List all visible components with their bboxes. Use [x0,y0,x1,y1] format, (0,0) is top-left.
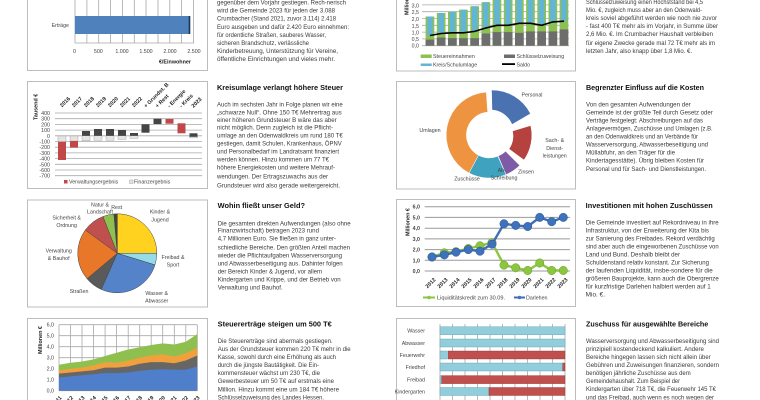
text block: key allocation peak: 2,6 Mio. €. Im Crumbacher Haushalt verbleiben [586,31,714,38]
panel: waterfall chart of results: 2018 [83,96,96,109]
heading and text: tax revenue up: durch die jüngste Bautätigkeit. Die Ein- [218,362,319,369]
heading and text: subsidies for selected areas: Gebühren und Zuweisungen finanzieren, sondern [586,362,720,369]
text block: expenses and income per inhabitant: für ordentliche Straßen, sauberes Wasser, [217,32,326,39]
panel: waterfall chart of results [28,82,208,188]
panel: waterfall chart of results: 200 [41,122,50,128]
panel: waterfall chart of results: + Rest [155,93,171,109]
heading and text: district levy: umlage an den Odenwaldkreis um rund 180 T€ [217,133,343,140]
text block: key allocation peak: kreis soviel abgeführt werden wie noch nie zuvor [586,15,717,22]
panel: spending pie chart: Freibad & [162,255,185,261]
panel: spending pie chart: Verwaltung [46,249,72,255]
heading and text: subsidies for selected areas: Gemeindehaushalt. Zum Beispiel der [586,378,680,385]
panel: spending pie chart: Kinder & [150,210,171,216]
heading and text: tax revenue up [218,320,351,400]
panel: waterfall chart of results: 2022 [131,96,144,109]
heading and text: where the money goes: Finanzwirtschaft) betragen 2023 rund [218,228,320,235]
heading and text: where the money goes: der Bereich Kinder & Jugend, vor allem [218,268,322,275]
panel: tax revenue stacked area chart: 6,0 [47,323,54,329]
panel: waterfall chart of results: - Kreis [179,93,195,109]
heading and text: where the money goes: wieder die Pflichtaufgaben Wasserversorgung [217,252,343,259]
panel: waterfall chart of results: 400 [41,111,50,117]
heading and text: district levy: werden können. Hinzu kommen um 77 T€ [216,157,330,164]
panel: subsidy share stacked bars: Abwasser [402,341,425,347]
heading and text: where the money goes: schiedliche Bereiche. Den größten Anteil machen [218,244,351,251]
heading and text: tax revenue up: Million. Hinzu kommt eine um 184 T€ höhere [218,386,340,393]
panel: loans and liquidity credit line chart: Liquiditätskredit zum 30.09. [437,296,505,302]
panel: tax revenue, key allocation and levy stacked bars: 0,0 [412,44,419,50]
panel: tax revenue, key allocation and levy stacked bars: Schlüsselzuweisung [516,54,564,60]
panel: waterfall chart of results: + Grundst. B [143,82,170,109]
panel: tax revenue, key allocation and levy stacked bars: 3,0 [412,3,419,9]
text block: key allocation peak: letzten Jahr, also knapp über 1,8 Mio. €. [586,48,692,55]
heading and text: district levy: Grundsteuer wird also gerade weitergereicht. [217,182,340,189]
panel: income per inhabitant bar chart: 1.500 [139,49,153,55]
text block: expenses and income per inhabitant [216,0,349,63]
heading and text: investments with grants: für kurzfristige Darlehen halbiert werden auf 1 [586,284,711,291]
text block: expenses and income per inhabitant: wird die Gemeinde 2023 für jeden der 3.088 [216,8,336,15]
panel: spending pie chart: Landschaft [87,210,113,216]
heading and text: district levy: wendungen. Der Ertragszuwachs aus der [216,173,328,180]
panel: expense donut chart: Umlagen [419,128,441,134]
heading and text: district levy: „schwarze Null“. Ohne 150 T€ Mehrertrag aus [217,110,342,117]
panel: loans and liquidity credit line chart: 2012 [425,277,437,290]
panel: tax revenue stacked area chart: 2,0 [47,367,54,373]
panel: subsidy share stacked bars [395,318,576,400]
panel: waterfall chart of results: 100 [41,128,50,134]
panel: tax revenue, key allocation and levy stacked bars: 1,5 [412,24,419,30]
panel: tax revenue, key allocation and levy stacked bars [396,0,576,71]
heading and text: limited influence on costs: Begrenzter Einfluss auf die Kosten [586,83,704,92]
panel: spending pie chart: Rest [111,205,123,211]
heading and text: investments with grants: der laufenden Liquidität, insbe-sondere für die [586,268,713,275]
panel: spending pie chart: Jugend [151,217,169,223]
panel: waterfall chart of results: 2021 [119,96,132,109]
heading and text: tax revenue up: Kasse, sowohl durch eine Erhöhung als auch [218,354,337,361]
panel: loans and liquidity credit line chart: 2020 [521,277,533,290]
panel: expense donut chart: Zinsen [518,170,534,176]
heading and text: investments with grants: Land und Bund. Deshalb bleibt der [586,252,680,259]
panel: tax revenue stacked area chart: 0,0 [47,389,54,395]
heading and text: investments with grants: Mio. €. [586,292,605,299]
text block: expenses and income per inhabitant: sicheren Brandschutz, verlässliche [217,40,310,47]
panel: tax revenue stacked area chart [28,318,208,400]
panel: waterfall chart of results: -700 [39,174,50,180]
heading and text: tax revenue up: Aus der Grundsteuer kommen 220 T€ mehr in die [218,346,351,353]
heading and text: investments with grants [586,201,719,299]
panel: spending pie chart: Sport [167,263,180,269]
panel: subsidy share stacked bars: Wasser [407,329,425,335]
panel: income per inhabitant bar chart: 1.000 [115,49,129,55]
panel: loans and liquidity credit line chart: 2014 [449,277,461,290]
heading and text: where the money goes: Die gesamten direkten Aufwendungen (also ohne [218,220,351,227]
panel: tax revenue, key allocation and levy stacked bars: Kreis/Schulumlage [433,62,477,68]
donut slices [446,90,532,178]
heading and text: tax revenue up: Die Steuererträge sind abermals gestiegen. [218,338,333,345]
heading and text: district levy: Auch im sechsten Jahr in Folge planen wir eine [217,101,343,108]
heading and text: district levy: höhere Energiekosten und weitere Mehrauf- [217,165,335,172]
panel: waterfall chart of results: -300 [39,151,50,157]
heading and text: district levy: Kreisumlage verlangt höhere Steuer [217,83,343,92]
panel: waterfall chart of results: 0 [47,134,50,140]
heading and text: tax revenue up: Gewerbesteuer um 50 T€ auf erstmals eine [218,378,335,385]
panel: loans and liquidity credit line chart: 6,0 [413,205,420,211]
panel: tax revenue stacked area chart: 4,0 [47,345,54,351]
panel: loans and liquidity credit line chart: 2015 [461,277,473,290]
heading and text: subsidies for selected areas: Wasserversorgung und Abwasserbeseitigung sind [586,338,720,345]
heading and text: subsidies for selected areas [586,320,720,400]
panel: expense donut chart: leistungen [543,154,567,160]
panel: tax revenue stacked area chart: 1,0 [47,378,54,384]
panel: waterfall chart of results: 2020 [107,96,120,109]
panel: loans and liquidity credit line chart: 0,0 [413,269,420,275]
panel: waterfall chart of results: 300 [41,117,50,123]
panel: income per inhabitant bar chart: Erträge [52,23,69,29]
panel: expense donut chart: Zuschüsse [454,176,480,182]
panel: expense donut chart: Personal [522,92,542,98]
panel: loans and liquidity credit line chart: 2016 [473,277,485,290]
heading and text: tax revenue up: kommensteuer wächst um 230 T€, die [218,370,321,377]
panel: loans and liquidity credit line chart: 2018 [497,277,509,290]
panel: waterfall chart of results: 2019 [95,96,108,109]
panel: spending pie chart: Natur & [91,203,109,209]
pie slices [78,214,157,293]
panel: loans and liquidity credit line chart: 2023 [557,277,569,290]
panel: loans and liquidity credit line chart: Darlehen [526,296,548,302]
panel: loans and liquidity credit line chart: 2021 [533,277,545,290]
heading and text: district levy: gestiegen, damit Schulen, Krankenhaus, ÖPNV [217,141,343,148]
panel: loans and liquidity credit line chart: 2,0 [413,248,420,254]
heading and text: limited influence on costs: Personal und für Sach- und Dienstleistungen. [586,166,706,173]
heading and text: subsidies for selected areas: Kindergarten über 718 T€, die Feuerwehr 145 T€ [586,386,717,393]
text block: key allocation peak: - fast 400 T€ mehr als im Vorjahr, in Summe über [586,23,718,30]
heading and text: where the money goes: Kindergarten und Krippe, und der Betrieb von [218,276,341,283]
heading and text: investments with grants: Investitionen mit hohen Zuschüssen [586,201,713,210]
panel: waterfall chart of results: Finanzergebnis [134,180,171,186]
heading and text: limited influence on costs: Gemeinde ist der größte Teil durch Gesetz oder [586,110,713,117]
panel: waterfall chart of results: - Energie [167,89,187,109]
panel: waterfall chart of results: 2016 [59,96,72,109]
text block: expenses and income per inhabitant: Kinderbetreuung, Unterstützung für Vereine, [217,48,338,55]
panel: subsidy share stacked bars: Freibad [407,378,425,384]
panel: expense donut chart: Schreibung [491,176,517,182]
heading and text: subsidies for selected areas: Zuschuss für ausgewählte Bereiche [586,320,708,328]
panel: loans and liquidity credit line chart: 2019 [509,277,521,290]
panel: tax revenue stacked area chart: 3,0 [47,356,54,362]
panel: loans and liquidity credit line chart: 2013 [437,277,449,290]
heading and text: investments with grants: größeren Bauprojekte, kann auch die Obergrenze [586,276,719,283]
heading and text: limited influence on costs: Wasserversorgung, Abwasserbeseitigung und [586,141,709,148]
panel: expense donut chart: Sach- & [545,138,565,144]
heading and text: district levy: und Personalbedarf im Landratsamt finanziert [217,149,339,156]
heading and text: limited influence on costs: Anlagevermögen, Zuschüsse und Umlagen (z.B. [586,125,713,132]
panel: tax revenue, key allocation and levy stacked bars: 2,0 [412,17,419,23]
heading and text: where the money goes: Wohin fließt unser Geld? [218,201,306,210]
heading and text: investments with grants: Die Gemeinde investiert auf Rekordniveau in ihre [586,220,719,227]
panel: loans and liquidity credit line chart [396,200,576,306]
panel: tax revenue stacked area chart: 5,0 [47,334,54,340]
panel: expense donut chart: Ab- [498,168,506,174]
panel: loans and liquidity credit line chart: 5,0 [413,215,420,221]
heading and text: limited influence on costs: Von den gesamten Aufwendungen der [586,101,691,108]
heading and text: investments with grants: zur Sanierung des Freibades. Rekord verdächtig [586,236,715,243]
panel: waterfall chart of results: -200 [39,145,50,151]
heading and text: where the money goes [217,201,351,291]
panel: tax revenue, key allocation and levy stacked bars: 1,0 [412,31,419,37]
panel: income per inhabitant bar chart [28,0,208,70]
panel: income per inhabitant bar chart: 2.500 [187,49,201,55]
panel: expense donut chart: Dienst- [546,146,563,152]
heading and text: subsidies for selected areas: Bereiche hingegen lassen sich nicht allein über [586,354,711,361]
heading and text: district levy [216,83,343,189]
heading and text: where the money goes: und Abwasserbeseitigung aus. Dahinter folgen [218,260,343,267]
panel: tax revenue, key allocation and levy stacked bars: Steuereinnahmen [433,54,475,60]
panel: income per inhabitant bar chart: 500 [94,49,103,55]
text block: key allocation peak: für eigene Zwecke gerade mal 72 T€ mehr als im [586,40,715,47]
heading and text: where the money goes: Verwaltung und Bauhof. [218,284,283,291]
heading and text: limited influence on costs: Verträge festgelegt: Abschreibungen auf das [586,117,703,124]
text block: expenses and income per inhabitant: Crumbacher (Stand 2021, zuvor 3.114) 2.418 [217,15,337,22]
panel: spending pie chart: Ordnung [56,223,77,229]
panel: waterfall chart of results: -600 [39,168,50,174]
heading and text: subsidies for selected areas: prinzipiell kostendeckend kalkuliert. Andere [586,346,705,353]
panel: spending pie chart [28,200,208,307]
panel: loans and liquidity credit line chart: 3,0 [413,237,420,243]
heading and text: investments with grants: Schuldenstand relativ konstant. Zur Sicherung [586,260,710,267]
text block: expenses and income per inhabitant: öffentliche Einrichtungen und vieles mehr. [217,56,335,63]
panel: waterfall chart of results: Tausend € [34,94,40,120]
panel: tax revenue, key allocation and levy stacked bars: 2,5 [412,10,419,16]
panel: loans and liquidity credit line chart: Millionen € [406,208,412,236]
panel: expense donut chart [396,82,576,189]
heading and text: subsidies for selected areas: benötigen jährliche Zuschüsse aus dem [586,370,691,377]
panel: income per inhabitant bar chart: 0 [73,49,76,55]
heading and text: tax revenue up: Steuererträge steigen um 500 T€ [218,320,332,328]
panel: waterfall chart of results: -500 [39,162,50,168]
panel: spending pie chart: & Bauhof [48,256,70,262]
panel: spending pie chart: Wasser & [145,291,169,297]
text block: key allocation peak: Mio. €, zugleich muss aber an den Odenwald- [586,7,702,14]
heading and text: limited influence on costs [586,83,713,173]
panel: income per inhabitant bar chart: 2.000 [163,49,177,55]
panel: loans and liquidity credit line chart: 2017 [485,277,497,290]
heading and text: limited influence on costs: an den Odenwaldkreis und an Verbände für [586,133,698,140]
panel: tax revenue stacked area chart: Millionen € [38,326,44,354]
panel: waterfall chart of results: 2023 [191,97,203,109]
panel: subsidy share stacked bars: Feuerwehr [400,353,425,359]
panel: loans and liquidity credit line chart: 2022 [545,277,557,290]
panel: spending pie chart: Straßen [70,289,88,295]
panel: spending pie chart: Sicherheit & [52,216,81,222]
panel: waterfall chart of results: -100 [39,140,50,146]
heading and text: where the money goes: 4,7 Millionen Euro. Sie fließen in ganz unter- [218,236,336,243]
panel: loans and liquidity credit line chart: 4,0 [413,226,420,232]
panel: tax revenue, key allocation and levy stacked bars: Saldo [516,62,530,68]
panel: subsidy share stacked bars: Friedhof [406,365,426,371]
heading and text: investments with grants: Infrastruktur, von der Erweiterung der Kita bis [586,228,709,235]
text block: key allocation peak [586,0,718,55]
panel: tax revenue, key allocation and levy stacked bars: 0,5 [412,37,419,43]
heading and text: district levy: einer höheren Grundsteuer B wäre das aber [217,117,337,124]
panel: waterfall chart of results: -400 [39,157,50,163]
panel: spending pie chart: Abwasser [145,298,169,304]
panel: waterfall chart of results: 2017 [71,96,84,109]
text block: expenses and income per inhabitant: Euro ausgeben und dafür 2.420 Euro einnehmen: [217,24,349,31]
heading and text: district levy: nicht möglich. Denn zugleich ist die Pflicht- [217,125,333,132]
panel: subsidy share stacked bars: Kindergarten [395,390,425,396]
heading and text: limited influence on costs: Müllabfuhr, an den Träger für die [586,149,676,156]
panel: income per inhabitant bar chart: €/Einwohner [159,60,192,66]
panel: loans and liquidity credit line chart: 1,0 [413,258,420,264]
heading and text: investments with grants: sind aber auch die eingeworbenen Zuschüsse von [586,244,719,251]
panel: waterfall chart of results: Verwaltungsergebnis [69,180,119,186]
heading and text: limited influence on costs: Kindertagesstätte). Übrig bleiben Kosten für [586,157,704,164]
